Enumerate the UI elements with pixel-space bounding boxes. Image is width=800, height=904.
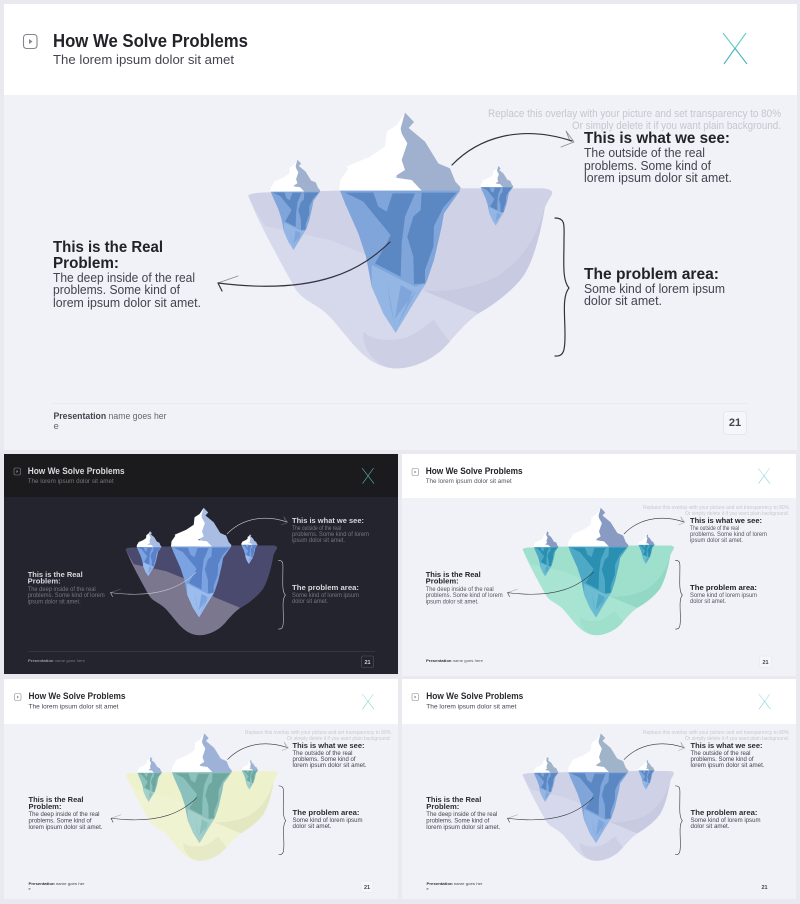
callout: real problem: problems. Some kind of lorem [28, 592, 105, 599]
callout: problem area: The problem area: [690, 808, 758, 817]
callout: what we see [690, 741, 765, 769]
subtitle: The lorem ipsum dolor sit amet [28, 478, 114, 485]
subtitle: The lorem ipsum dolor sit amet [53, 52, 234, 67]
callout: what we see: ipsum dolor sit amet. [690, 537, 743, 544]
callout: problem area: The problem area: [292, 808, 360, 817]
main slide [4, 4, 797, 450]
icon: play button [412, 694, 418, 700]
subtitle: The lorem ipsum dolor sit amet [28, 704, 119, 710]
callout: problem area [690, 808, 760, 830]
callout: problem area: Some kind of lorem ipsum [584, 282, 725, 296]
callout: real problem: This is the Real [426, 570, 481, 579]
callout: problem area: The problem area: [584, 266, 719, 283]
footer text [28, 882, 85, 891]
callout: what we see: The outside of the real [690, 750, 750, 757]
callout: real problem: Problem: [426, 802, 459, 811]
callout: what we see: The outside of the real [690, 525, 739, 532]
footer text [426, 882, 483, 891]
iceberg diagram [111, 733, 288, 861]
callout: what we see: lorem ipsum dolor sit amet. [292, 762, 367, 769]
callout: what we see: This is what we see: [292, 741, 364, 750]
footer text: e [54, 421, 59, 432]
callout: what we see: problems. Some kind of [690, 756, 754, 763]
callout: real problem: The deep inside of the real [426, 811, 497, 818]
page number [362, 656, 374, 668]
callout: real problem: This is the Real [28, 795, 84, 804]
logo [723, 33, 747, 64]
callout: real problem [53, 239, 201, 310]
callout: what we see: problems. Some kind of lorem [292, 531, 369, 538]
callout: real problem: The deep inside of the real [28, 586, 96, 593]
title: How We Solve Problems [28, 691, 126, 701]
overlay note [245, 730, 391, 742]
overlay note: Or simply delete it if you want plain background. [685, 511, 789, 517]
callout: what we see: problems. Some kind of [584, 159, 712, 173]
callout: what we see: This is what we see: [584, 130, 730, 147]
iceberg diagram [508, 733, 685, 861]
callout: problem area: dolor sit amet. [690, 598, 726, 605]
callout: what we see [292, 516, 369, 544]
subtitle: The lorem ipsum dolor sit amet [426, 478, 512, 485]
callout: problem area: Some kind of lorem ipsum [292, 817, 362, 824]
callout: problem area [584, 266, 725, 308]
callout: real problem [426, 795, 501, 831]
icon: play button [24, 34, 37, 48]
callout: real problem: Problem: [426, 576, 459, 586]
footer text: Presentation name goes here [426, 659, 483, 663]
footer text: Presentation name goes her [28, 882, 85, 886]
overlay note [488, 108, 781, 132]
page number: 21 [761, 885, 768, 891]
callout: real problem: Problem: [28, 802, 62, 811]
callout: real problem: Problem: [53, 255, 119, 272]
callout: what we see [690, 516, 767, 544]
callout: what we see: This is what we see: [690, 741, 762, 750]
callout: real problem: ipsum dolor sit amet. [28, 598, 81, 606]
iceberg diagram [508, 508, 685, 635]
callout: real problem: The deep inside of the real [53, 271, 195, 285]
callout: what we see: The outside of the real [292, 525, 341, 532]
callout: real problem: problems. Some kind of [28, 818, 92, 824]
callout: real problem: The deep inside of the real [28, 811, 100, 818]
footer text [54, 411, 166, 432]
callout: problem area: The problem area: [690, 583, 757, 592]
callout: problem area [292, 808, 362, 830]
overlay note: Replace this overlay with your picture and set transparency to 80% [643, 505, 789, 511]
title: How We Solve Problems [426, 466, 523, 476]
callout: real problem: lorem ipsum dolor sit amet. [28, 824, 103, 831]
page number: 21 [364, 885, 370, 891]
callout: real problem: lorem ipsum dolor sit amet. [426, 824, 501, 831]
header band [4, 679, 398, 724]
callout: real problem: This is the Real [53, 239, 163, 256]
icon: play button [14, 694, 21, 700]
callout: real problem: lorem ipsum dolor sit amet. [53, 296, 201, 310]
overlay note: Or simply delete it if you want plain background. [572, 120, 781, 132]
callout: what we see: problems. Some kind of [292, 756, 356, 763]
logo [362, 694, 374, 709]
header band [402, 679, 796, 724]
callout: problem area [292, 583, 359, 605]
callout: what we see: ipsum dolor sit amet. [292, 537, 345, 544]
callout: what we see [584, 130, 732, 185]
footer text: e [426, 887, 429, 891]
callout: problem area: Some kind of lorem ipsum [292, 592, 359, 599]
callout: real problem [28, 795, 103, 831]
page number: 21 [762, 660, 769, 666]
callout: what we see: The outside of the real [292, 750, 352, 757]
callout: what we see: The outside of the real [584, 146, 705, 160]
logo [758, 468, 770, 484]
icon: play button [412, 468, 418, 476]
callout: what we see: This is what we see: [690, 516, 762, 525]
slide: mint variant [402, 454, 796, 676]
callout: what we see: problems. Some kind of lorem [690, 531, 767, 538]
overlay note: Replace this overlay with your picture and set transparency to 80% [245, 730, 391, 736]
callout: problem area: dolor sit amet. [584, 294, 662, 308]
subtitle: The lorem ipsum dolor sit amet [426, 704, 516, 710]
callout: problem area [690, 583, 757, 605]
logo [759, 694, 771, 709]
slide: dark variant [4, 454, 398, 674]
callout: what we see: lorem ipsum dolor sit amet. [690, 762, 765, 769]
callout: real problem [28, 570, 105, 606]
callout: problem area: Some kind of lorem ipsum [690, 817, 760, 824]
callout: what we see: This is what we see: [292, 516, 364, 525]
callout: real problem: This is the Real [28, 570, 83, 579]
callout: problem area: Some kind of lorem ipsum [690, 592, 757, 599]
callout: real problem [426, 570, 503, 606]
footer text: Presentation name goes her [54, 411, 166, 422]
overlay note: Or simply delete it if you want plain background. [287, 736, 391, 742]
page number: 21 [729, 417, 741, 429]
footer text: Presentation name goes here [28, 659, 85, 663]
callout: real problem: Problem: [28, 576, 61, 586]
overlay note: Or simply delete it if you want plain background. [685, 736, 789, 742]
footer text: Presentation name goes her [426, 882, 483, 886]
title: How We Solve Problems [53, 31, 248, 51]
slide: yellow variant [4, 679, 398, 899]
overlay note [643, 730, 789, 742]
header band [402, 454, 796, 498]
page number: 21 [364, 660, 371, 666]
header band [4, 4, 797, 95]
callout: real problem: problems. Some kind of [426, 818, 490, 824]
callout: real problem: problems. Some kind of [53, 283, 181, 297]
callout: what we see [292, 741, 367, 769]
callout: problem area: The problem area: [292, 583, 359, 592]
callout: problem area: dolor sit amet. [292, 823, 332, 830]
iceberg diagram with arrows and brace [218, 113, 574, 368]
page number [724, 412, 746, 434]
callout: problem area: dolor sit amet. [690, 823, 730, 830]
overlay note [643, 505, 789, 517]
callout: real problem: This is the Real [426, 795, 481, 804]
iceberg diagram [111, 508, 288, 635]
overlay note: Replace this overlay with your picture and set transparency to 80% [643, 730, 789, 736]
title: How We Solve Problems [426, 691, 523, 701]
header band [4, 454, 398, 497]
callout: real problem: problems. Some kind of lorem [426, 592, 503, 599]
callout: real problem: The deep inside of the real [426, 586, 494, 593]
logo [362, 468, 374, 484]
callout: what we see: lorem ipsum dolor sit amet. [584, 171, 732, 185]
slide: blue variant [402, 679, 796, 899]
callout: real problem: ipsum dolor sit amet. [426, 598, 479, 606]
footer text: e [28, 887, 31, 891]
page number [760, 656, 772, 668]
page number [361, 881, 373, 892]
callout: problem area: dolor sit amet. [292, 598, 328, 605]
icon: play button [14, 468, 20, 475]
title: How We Solve Problems [28, 466, 125, 476]
